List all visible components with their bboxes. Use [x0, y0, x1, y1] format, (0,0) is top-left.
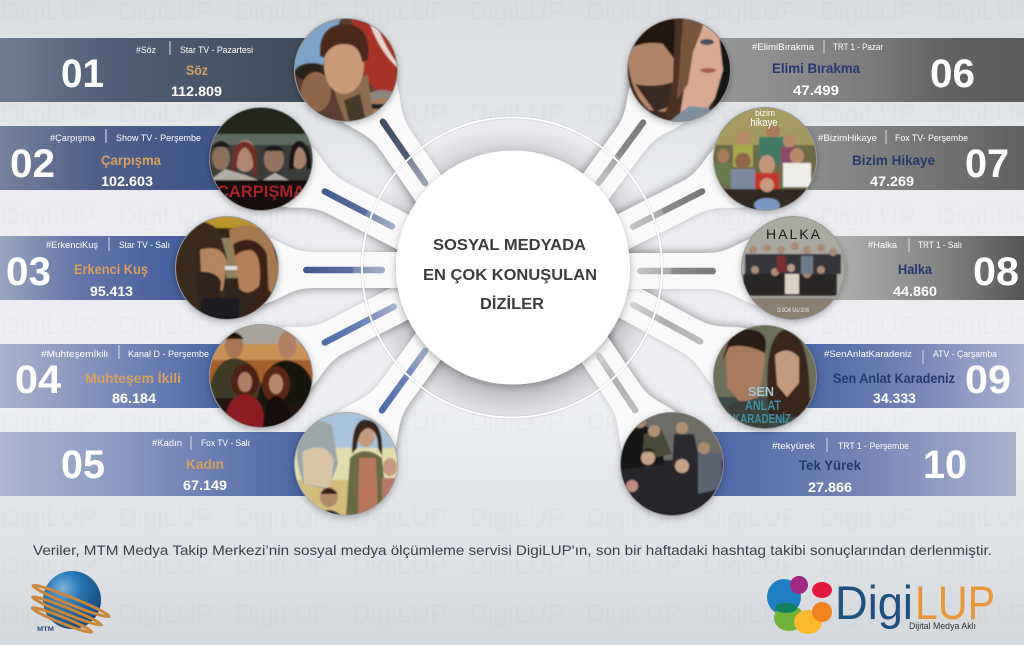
spoke 10 — [529, 277, 686, 461]
watermark pattern: DigiLUP — [1, 550, 96, 580]
row 08: Halka: TRT 1 - Salı — [918, 240, 962, 251]
watermark pattern: DigiLUP — [1, 310, 96, 340]
watermark pattern: DigiLUP — [586, 502, 681, 532]
row 01: Söz: Söz — [186, 63, 208, 78]
row 07: Bizim Hikaye: 47.269 — [870, 174, 914, 189]
row 10: Tek Yürek: Tek Yürek — [799, 458, 861, 473]
logo tagline: Dijital Medya Aklı — [909, 621, 976, 631]
row 01: Söz — [0, 38, 320, 102]
row 10: Tek Yürek: TRT 1 - Perşembe — [838, 441, 909, 452]
photo 09: Sen Anlat Karadeniz: SEN — [748, 384, 774, 399]
watermark pattern: DigiLUP — [1, 98, 96, 128]
row 03: Erkenci Kuş: 03 — [6, 250, 51, 294]
row 01: Söz: #Söz — [136, 45, 156, 56]
row 07: Bizim Hikaye: Bizim Hikaye — [852, 153, 935, 168]
spoke 08 — [591, 235, 765, 307]
row 01: Söz: 01 — [61, 52, 104, 96]
footer note: Veriler, MTM Medya Takip Merkezi’nin sosyal medya ölçümleme servisi DigiLUP'ın, son bir haftadaki hashtag takibi sonuçlarından derlenmiştir. — [33, 542, 992, 558]
DigiLUP logo — [767, 576, 995, 634]
watermark pattern: DigiLUP — [469, 310, 564, 340]
watermark pattern: DigiLUP — [586, 310, 681, 340]
row 06: Elimi Bırakma: 06 — [930, 52, 975, 96]
row 10: Tek Yürek — [700, 432, 1016, 496]
logo wordmark LUP: LUP — [915, 576, 995, 629]
watermark pattern: DigiLUP — [820, 502, 915, 532]
row 03: Erkenci Kuş: 95.413 — [90, 284, 134, 299]
watermark pattern: DigiLUP — [703, 550, 798, 580]
photo 07: Bizim Hikaye: bizim — [755, 108, 775, 118]
watermark pattern: DigiLUP — [352, 550, 447, 580]
row 08: Halka — [830, 236, 1024, 300]
row 06: Elimi Bırakma: TRT 1 - Pazar — [833, 42, 883, 53]
photo 02: Çarpışma: ÇARPIŞMA — [217, 182, 305, 201]
row 07: Bizim Hikaye — [800, 126, 1024, 190]
row 01: Söz: Star TV - Pazartesi — [180, 45, 253, 56]
spokes — [255, 72, 765, 461]
title: SOSYAL MEDYADA — [433, 237, 586, 254]
row 05: Kadın — [0, 432, 320, 496]
watermark pattern: DigiLUP — [820, 550, 915, 580]
watermark pattern: DigiLUP — [118, 406, 213, 436]
photo 03: Erkenci Kuş — [175, 216, 279, 320]
watermark pattern: DigiLUP — [703, 98, 798, 128]
photo 09: Sen Anlat Karadeniz: KARADENİZ — [733, 411, 791, 426]
row 02: Çarpışma: 102.603 — [101, 174, 154, 189]
watermark pattern: DigiLUP — [469, 201, 564, 231]
watermark pattern: DigiLUP — [118, 598, 213, 628]
logo blobs — [767, 576, 832, 634]
watermark pattern: DigiLUP — [703, 598, 798, 628]
photo 09: Sen Anlat Karadeniz: ANLAT — [745, 397, 781, 413]
row 02: Çarpışma: Show TV - Perşembe — [116, 133, 201, 144]
row 05: Kadın: 67.149 — [183, 478, 227, 493]
MTM logo: MTM — [37, 627, 54, 633]
row 06: Elimi Bırakma — [710, 38, 1024, 102]
row 04: Muhteşem İkili: 86.184 — [112, 391, 157, 406]
row 04: Muhteşem İkili — [0, 344, 235, 408]
watermark pattern: DigiLUP — [820, 310, 915, 340]
inner bar 04 — [321, 302, 398, 347]
inner bar 02 — [321, 187, 396, 231]
row 08: Halka: Halka — [898, 262, 932, 277]
inner bar 07 — [629, 187, 706, 231]
watermark pattern: DigiLUP — [703, 201, 798, 231]
watermark pattern: DigiLUP — [235, 502, 330, 532]
central hub backdrop — [362, 118, 662, 418]
inner bar 06 — [594, 118, 648, 187]
watermark pattern: DigiLUP — [235, 310, 330, 340]
row 09: Sen Anlat Karadeniz: ATV - Çarşamba — [933, 349, 998, 360]
title — [423, 237, 597, 313]
watermark pattern: DigiLUP — [703, 502, 798, 532]
watermark pattern: DigiLUP — [235, 406, 330, 436]
logo wordmark Digi: Digi — [835, 576, 913, 629]
watermark pattern: DigiLUP — [352, 201, 447, 231]
inner bar 10 — [594, 351, 640, 415]
photo 08: Halka: HALKA — [766, 226, 821, 242]
watermark pattern: DigiLUP — [352, 406, 447, 436]
spoke 03 — [255, 234, 429, 306]
row 10: Tek Yürek: 27.866 — [808, 480, 853, 495]
photo 08: Halka — [741, 216, 845, 320]
row 07: Bizim Hikaye: #BizimHikaye — [818, 133, 877, 144]
watermark pattern: DigiLUP — [586, 201, 681, 231]
row 09: Sen Anlat Karadeniz: #SenAnlatKaradeniz — [824, 349, 912, 360]
watermark pattern: DigiLUP — [586, 598, 681, 628]
watermark pattern: DigiLUP — [586, 98, 681, 128]
row 04: Muhteşem İkili: 04 — [15, 358, 62, 402]
central disc with title — [396, 150, 630, 384]
spoke 09 — [570, 248, 757, 395]
watermark pattern: DigiLUP — [118, 201, 213, 231]
row 07: Bizim Hikaye: Fox TV- Perşembe — [895, 133, 968, 144]
row 09: Sen Anlat Karadeniz: 34.333 — [873, 391, 917, 406]
title: DİZİLER — [480, 295, 544, 313]
hub outer ring — [362, 118, 662, 418]
photo 04: Muhteşem İkili — [209, 324, 313, 428]
photo 01: Söz — [294, 18, 398, 130]
row 05: Kadın: 05 — [61, 443, 105, 487]
row 08: Halka: 08 — [973, 250, 1019, 294]
photo 06: Elimi Bırakma — [627, 18, 731, 122]
watermark pattern: DigiLUP — [235, 598, 330, 628]
watermark pattern: DigiLUP — [820, 201, 915, 231]
photo 07: Bizim Hikaye: hikaye — [750, 117, 778, 129]
watermark pattern: DigiLUP — [703, 406, 798, 436]
row 02: Çarpışma: Çarpışma — [101, 153, 161, 168]
row 02: Çarpışma — [0, 126, 235, 190]
spoke 04 — [269, 251, 457, 395]
MTM logo — [31, 571, 110, 635]
photo 10: Tek Yürek — [620, 412, 724, 516]
row 04: Muhteşem İkili: #Muhteşemİkili — [41, 349, 108, 360]
watermark pattern: DigiLUP — [118, 98, 213, 128]
row 03: Erkenci Kuş: Erkenci Kuş — [74, 262, 148, 277]
row 03: Erkenci Kuş: #ErkenciKuş — [46, 240, 98, 251]
watermark pattern: DigiLUP — [1, 201, 96, 231]
watermark pattern: DigiLUP — [352, 502, 447, 532]
row 10: Tek Yürek: 10 — [923, 443, 967, 487]
spoke 01 — [333, 72, 491, 256]
row 05: Kadın: Fox TV - Salı — [201, 438, 250, 449]
watermark pattern: DigiLUP — [235, 201, 330, 231]
watermark pattern: DigiLUP — [1, 406, 96, 436]
watermark pattern: DigiLUP — [586, 550, 681, 580]
row 03: Erkenci Kuş — [0, 236, 200, 300]
inner bar 09 — [629, 300, 705, 346]
watermark pattern: DigiLUP — [820, 598, 915, 628]
row 04: Muhteşem İkili: Muhteşem İkili — [85, 371, 181, 386]
row 06: Elimi Bırakma: Elimi Bırakma — [772, 61, 860, 76]
watermark pattern: DigiLUP — [352, 98, 447, 128]
row 09: Sen Anlat Karadeniz: Sen Anlat Karadeniz — [833, 371, 955, 386]
spoke 02 — [270, 140, 457, 284]
photo 05: Kadın — [294, 412, 398, 516]
watermark pattern: DigiLUP — [352, 598, 447, 628]
row 04: Muhteşem İkili: Kanal D - Perşembe — [128, 349, 209, 360]
watermark pattern: DigiLUP — [586, 406, 681, 436]
row 09: Sen Anlat Karadeniz: 09 — [965, 358, 1011, 402]
watermark pattern: DigiLUP — [1, 598, 96, 628]
row 01: Söz: 112.809 — [171, 84, 222, 99]
watermark pattern: DigiLUP — [118, 310, 213, 340]
photo 07: Bizim Hikaye — [713, 107, 817, 212]
row 06: Elimi Bırakma: 47.499 — [793, 83, 839, 98]
inner bar 03 — [303, 267, 385, 273]
watermark pattern: DigiLUP — [235, 550, 330, 580]
spoke 05 — [331, 278, 492, 461]
row 05: Kadın: Kadın — [186, 457, 224, 472]
watermark pattern: DigiLUP — [469, 502, 564, 532]
watermark pattern: DigiLUP — [235, 98, 330, 128]
watermark pattern: DigiLUP — [1, 502, 96, 532]
watermark pattern: DigiLUP — [820, 98, 915, 128]
inner bar 05 — [377, 346, 430, 415]
title: EN ÇOK KONUŞULAN — [423, 267, 597, 284]
photo 08: Halka: 15 OCAK SALI 20:00 — [777, 308, 809, 314]
inner bar 01 — [378, 117, 430, 188]
photo 09: Sen Anlat Karadeniz — [713, 325, 817, 429]
watermark pattern: DigiLUP — [469, 98, 564, 128]
row 08: Halka: #Halka — [868, 240, 898, 251]
watermark pattern: DigiLUP — [469, 406, 564, 436]
inner bar 08 — [637, 268, 716, 274]
row 02: Çarpışma: #Çarpışma — [50, 133, 96, 144]
row 03: Erkenci Kuş: Star TV - Salı — [119, 240, 170, 251]
watermark pattern: DigiLUP — [469, 550, 564, 580]
row 07: Bizim Hikaye: 07 — [965, 142, 1009, 186]
watermark pattern: DigiLUP — [820, 406, 915, 436]
row 02: Çarpışma: 02 — [10, 142, 55, 186]
spoke 07 — [569, 140, 757, 283]
row 05: Kadın: #Kadın — [152, 438, 182, 449]
watermark pattern: DigiLUP — [352, 310, 447, 340]
watermark pattern: DigiLUP — [118, 550, 213, 580]
row 09: Sen Anlat Karadeniz — [800, 344, 1024, 408]
row 08: Halka: 44.860 — [893, 284, 937, 299]
watermark pattern: DigiLUP — [469, 598, 564, 628]
row 06: Elimi Bırakma: #ElimiBırakma — [752, 42, 815, 53]
row 10: Tek Yürek: #tekyürek — [772, 441, 815, 452]
watermark pattern: DigiLUP — [703, 310, 798, 340]
spoke 06 — [532, 72, 694, 255]
spoke inner bars — [303, 117, 716, 415]
photo 02: Çarpışma — [209, 107, 313, 212]
watermark pattern: DigiLUP — [118, 502, 213, 532]
